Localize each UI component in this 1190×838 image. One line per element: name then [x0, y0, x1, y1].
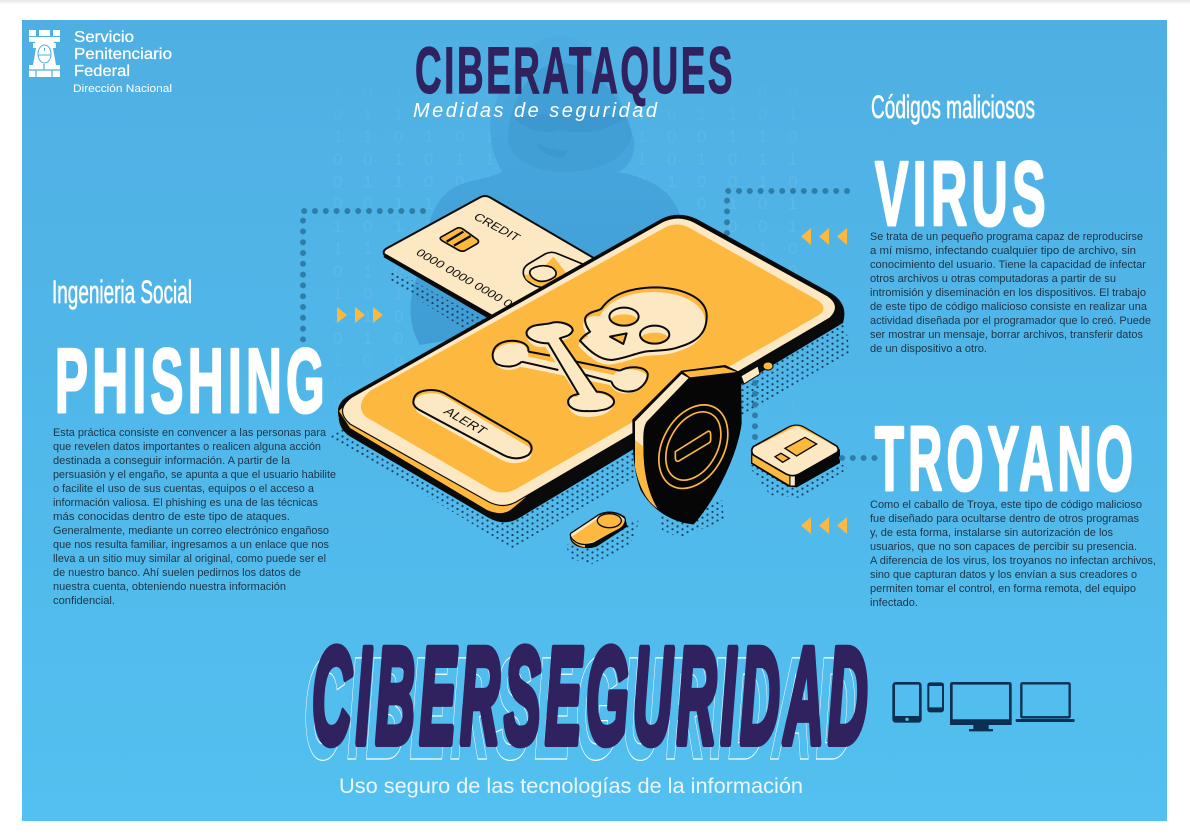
text block: phishing: más conocidas dentro de este tipo de ataques.: [53, 511, 290, 523]
binary code background: 0110011011010010: [333, 172, 797, 191]
text block: troyano: [870, 499, 1156, 609]
logo text: Penitenciario: [74, 46, 172, 63]
icon: tablet: [893, 683, 921, 722]
binary code background: 0100110101100101: [333, 329, 797, 348]
logo text: [73, 29, 172, 95]
dotted connector: troyano: [752, 383, 758, 440]
phone screen: [361, 224, 824, 492]
binary code background: 0011010110010101: [333, 194, 797, 213]
section label: ingenieria social: Ingenieria Social: [52, 274, 192, 310]
dotted connector: phishing: [303, 211, 423, 340]
icon: tower: [29, 30, 60, 77]
heading: ciberseguridad: [303, 620, 872, 791]
text block: phishing: [53, 427, 336, 607]
text block: phishing: información valiosa. El phishing es una de las técnicas: [53, 497, 318, 509]
text block: phishing: nuestra cuenta, obteniendo nuestra información: [53, 581, 286, 593]
text block: phishing: destinada a conseguir información. A partir de la: [53, 455, 291, 467]
alert button: ALERT: [440, 405, 490, 437]
card label: CREDIT: [471, 211, 523, 244]
text block: phishing: confidencial.: [53, 595, 115, 607]
text block: virus: intromisión y diseminación en los dispositivos. El trabajo: [870, 287, 1146, 299]
halftone shadows: [330, 268, 850, 565]
toggle switch: [570, 511, 627, 548]
text block: troyano: fue diseñado para ocultarse dentro de otros programas: [870, 513, 1139, 525]
section label: codigos maliciosos: Códigos maliciosos: [871, 89, 1035, 125]
binary code background: 1101101001011010: [333, 307, 797, 326]
subtitle: Medidas de seguridad: [413, 100, 658, 122]
text block: virus: actividad diseñada por el programador que lo creó. Puede: [870, 315, 1151, 327]
binary code background: [333, 60, 797, 415]
text block: virus: de un dispositivo a otro.: [870, 343, 987, 355]
card number: 0000 0000 0000 0000: [413, 247, 535, 321]
text block: virus: [870, 231, 1151, 355]
card hologram: [523, 252, 585, 287]
phone buttons: [741, 362, 773, 384]
text block: troyano: A diferencia de los virus, los troyanos no infectan archivos,: [870, 555, 1156, 567]
logo: Servicio Penitenciario Federal: [29, 29, 172, 95]
card chip: [440, 228, 479, 251]
title: CIBERATAQUES: [415, 33, 735, 107]
logo text: Servicio: [74, 29, 134, 46]
binary code background: 1001011010011010: [333, 351, 797, 370]
text block: troyano: sino que capturan datos y los envían a sus creadores o: [870, 569, 1137, 581]
binary code background: 1011100101011001: [333, 217, 797, 236]
binary code background: 1100101100100110: [333, 239, 797, 258]
binary code background: 0011001101001001: [333, 396, 797, 415]
binary code background: 0110100101010110: [333, 374, 797, 393]
text block: phishing: de nuestro banco. Ahí suelen pedirnos los datos de: [53, 567, 301, 579]
credit card: [384, 196, 600, 323]
icon: laptop: [1016, 683, 1075, 722]
icon: phone: [928, 683, 943, 711]
logo text: Dirección Nacional: [73, 83, 172, 95]
dotted connector: virus: [727, 191, 847, 236]
arrows: phishing: [337, 307, 383, 323]
text block: virus: ser mostrar un mensaje, borrar archivos, transferir datos: [870, 329, 1143, 341]
phone top face: [342, 218, 836, 506]
binary code background: 1101011001100110: [333, 127, 797, 146]
shield: [633, 366, 742, 523]
phone side: [339, 216, 843, 521]
icon: monitor: [950, 683, 1012, 731]
logo text: Federal: [74, 63, 130, 80]
bone vertical: [527, 322, 614, 417]
skull and crossbones: [493, 287, 707, 417]
alert button: [413, 390, 532, 463]
text block: virus: otros archivos u otras computadoras a partir de su: [870, 273, 1116, 285]
text block: troyano: y, de esta forma, instalarse sin autorización de los: [870, 527, 1113, 539]
text block: phishing: Esta práctica consiste en convencer a las personas para: [53, 427, 327, 439]
heading: virus: VIRUS: [875, 144, 1050, 245]
binary code background: 0101011011010010: [333, 262, 797, 281]
text block: virus: conocimiento del usuario. Tiene la capacidad de infectar: [870, 259, 1146, 271]
text block: phishing: que nos resulta familiar, ingresamos a un enlace que nos: [53, 539, 329, 551]
warning chip: [752, 425, 839, 487]
arrows: troyano: [801, 517, 847, 534]
shield rings: [645, 393, 742, 501]
dotted connector: chip: [842, 455, 875, 461]
text block: virus: de este tipo de código malicioso consiste en realizar una: [870, 301, 1148, 313]
binary code background: 0110100110101101: [333, 105, 797, 124]
arrows: virus: [801, 228, 847, 245]
binary code background: 0010110100101011: [333, 150, 797, 169]
binary code background: 0100110101101011: [333, 60, 797, 79]
skull: [578, 287, 707, 365]
bone horizontal: [493, 341, 648, 394]
text block: phishing: persuasión y el engaño, se apunta a que el usuario habilite: [53, 469, 336, 481]
text block: troyano: Como el caballo de Troya, este tipo de código malicioso: [870, 499, 1142, 511]
heading: phishing: PHISHING: [55, 331, 329, 432]
text block: troyano: usuarios, que no son capaces de percibir su presencia.: [870, 541, 1137, 553]
text block: phishing: lleva a un sitio muy similar al original, como puede ser el: [53, 553, 326, 565]
text block: phishing: o facilite el uso de sus cuentas, equipos o el acceso a: [53, 483, 315, 495]
text block: troyano: infectado.: [870, 597, 918, 609]
device icons: [893, 683, 1075, 731]
smartphone: [339, 216, 843, 521]
hacker silhouette: [411, 36, 690, 345]
caption: Uso seguro de las tecnologías de la información: [339, 774, 803, 798]
text block: virus: a mí mismo, infectando cualquier tipo de archivo, sin: [870, 245, 1136, 257]
text block: troyano: permiten tomar el control, en forma remota, del equipo: [870, 583, 1136, 595]
binary code background: 1011001011010100: [333, 82, 797, 101]
text block: virus: Se trata de un pequeño programa capaz de reproducirse: [870, 231, 1143, 243]
text block: phishing: Generalmente, mediante un correo electrónico engañoso: [53, 525, 329, 537]
binary code background: 1010010110101100: [333, 284, 797, 303]
text block: phishing: que revelen datos importantes o realicen alguna acción: [53, 441, 321, 453]
